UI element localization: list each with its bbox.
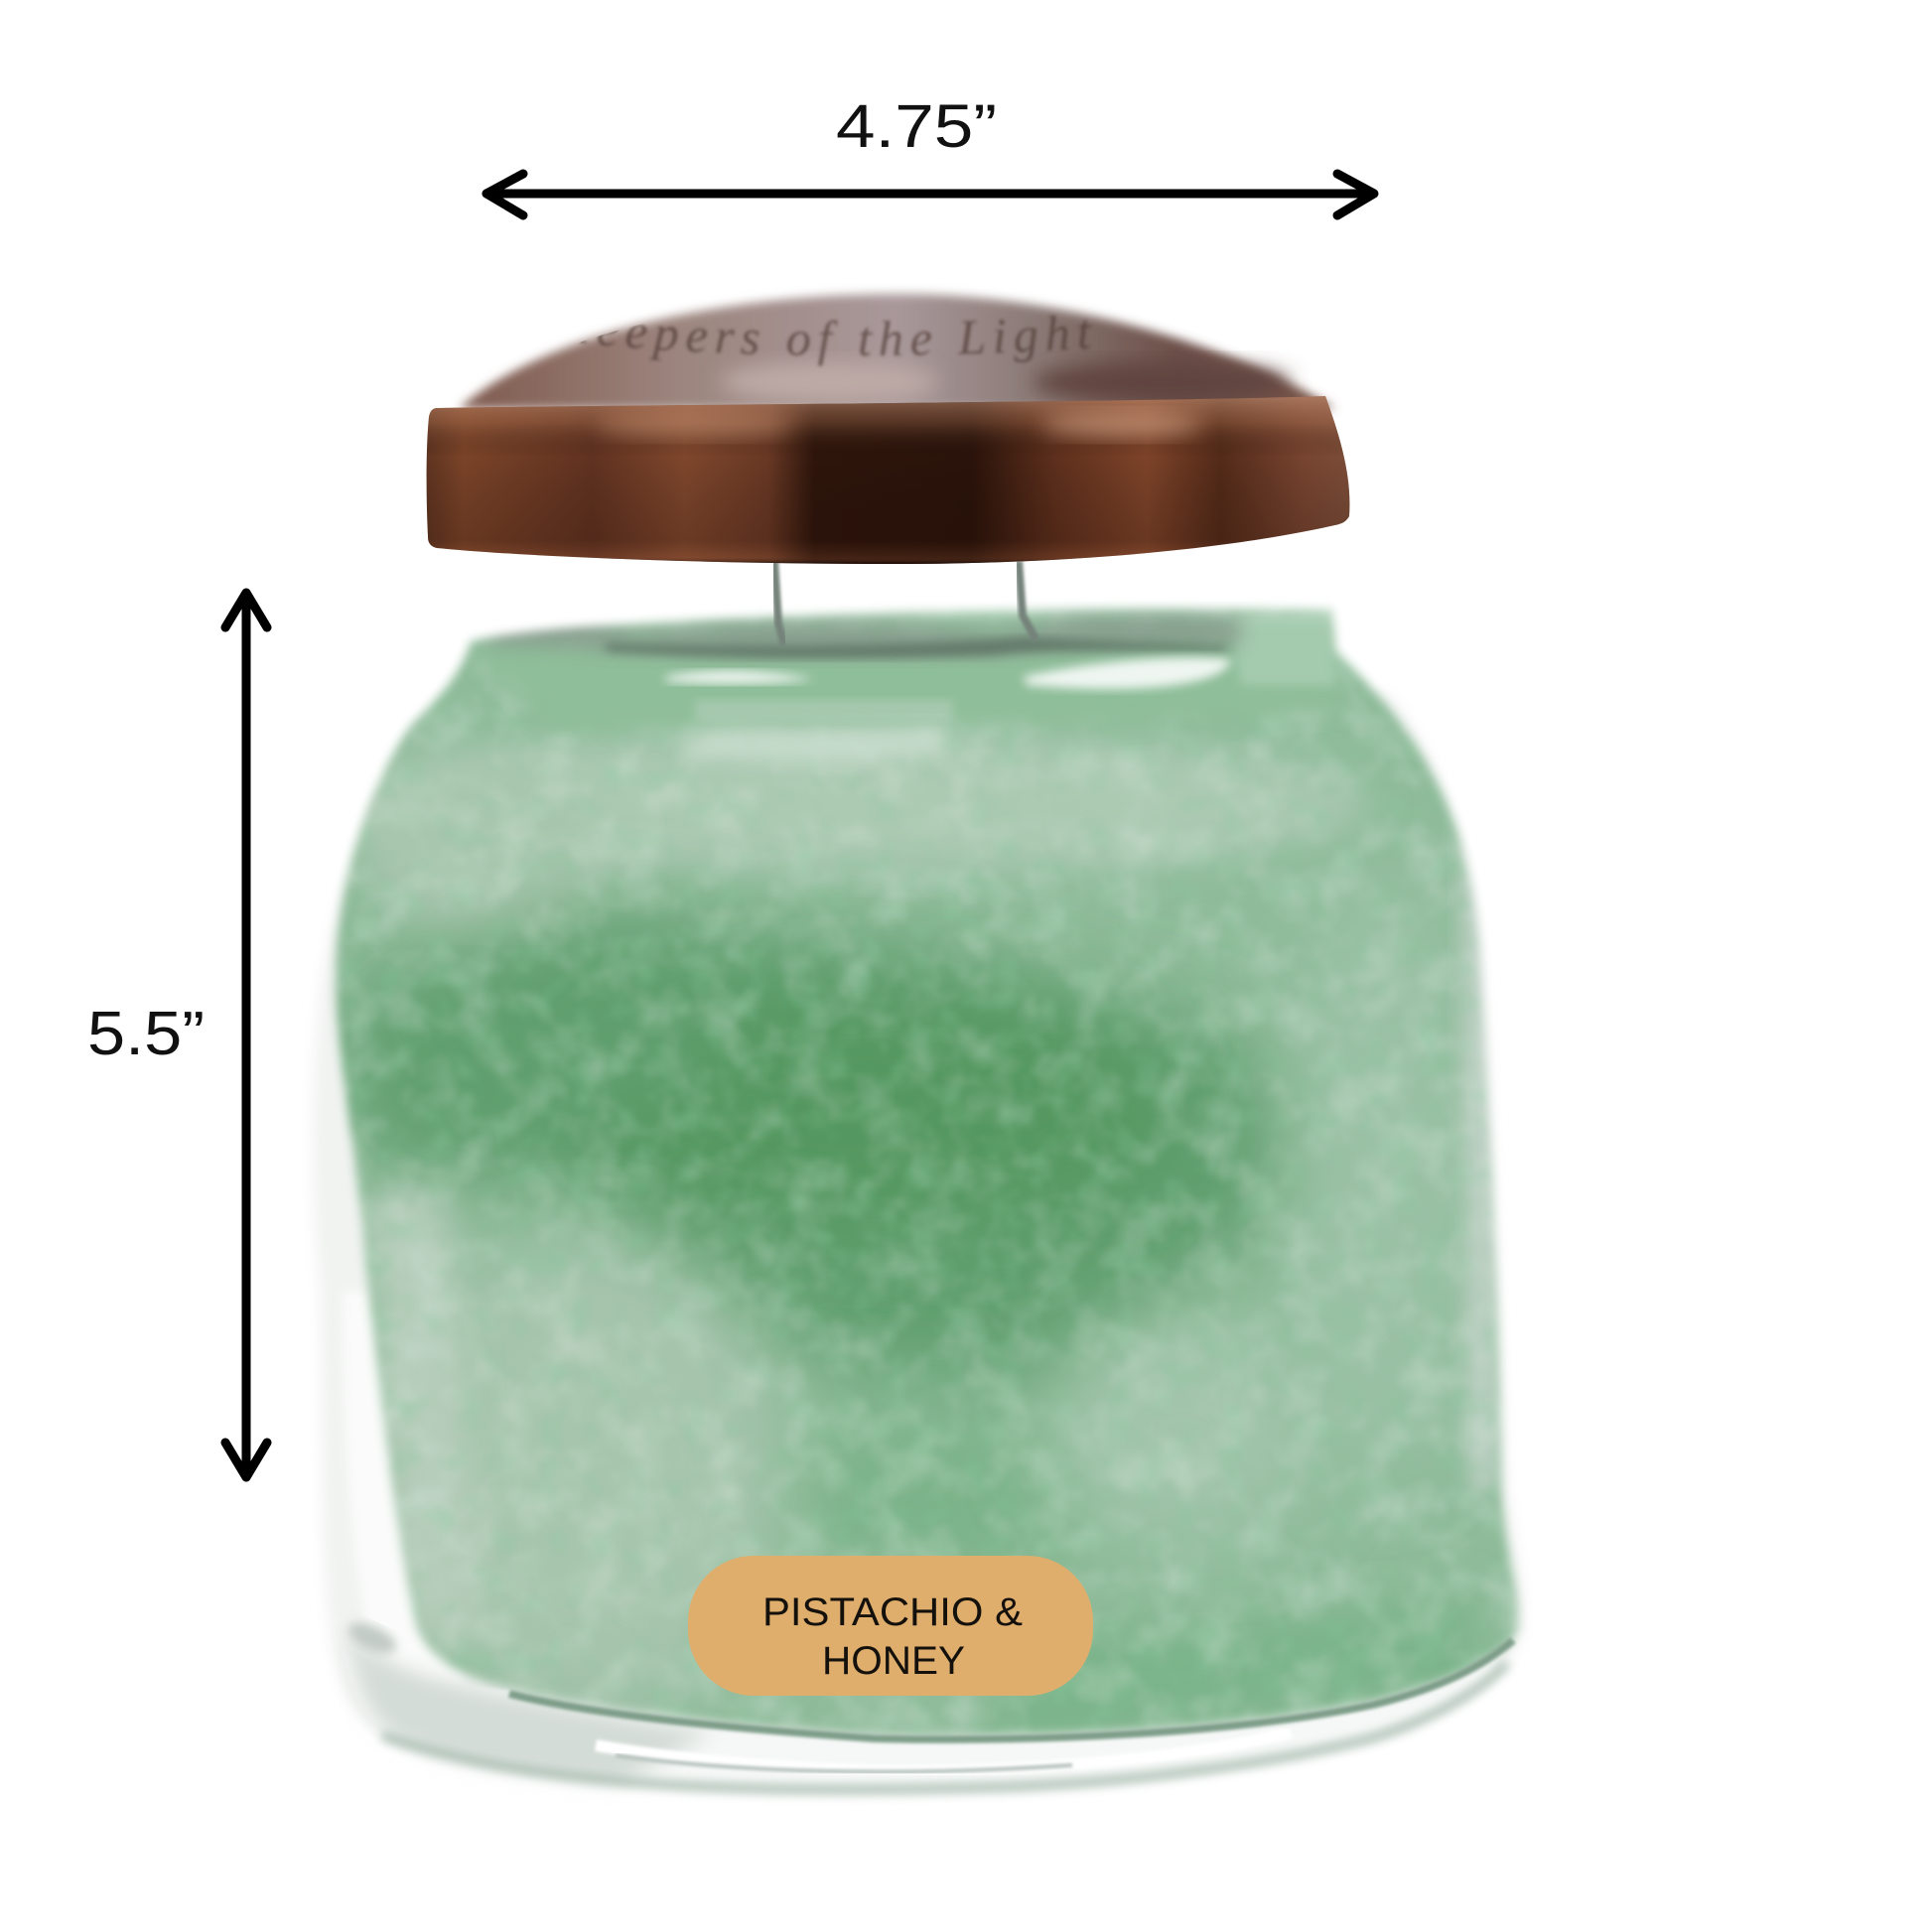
- neck wax and rim reflections: [475, 600, 1333, 769]
- outer bottom edge: [382, 1663, 1507, 1789]
- label text: HONEY: [822, 1639, 965, 1683]
- infographic: candle jar with dimensions: [89, 105, 1526, 1801]
- glass jar body: [312, 695, 1524, 1793]
- label text: [762, 1590, 1023, 1683]
- wicks: [774, 561, 1036, 645]
- wax fill with mottled green: [329, 602, 1524, 1735]
- width label: 4.75”: [836, 92, 997, 160]
- base glass fill: [343, 1638, 1514, 1793]
- wax bottom line: [509, 1640, 1513, 1739]
- streaks: [596, 1732, 1291, 1771]
- candle jar: [258, 287, 1526, 1801]
- width dimension arrow: [486, 174, 1374, 215]
- copper lid: [427, 287, 1350, 564]
- wax mottling: [337, 618, 1519, 1733]
- pale upper wax: [298, 735, 1370, 874]
- lid dome: [456, 287, 1337, 415]
- lower wax tones: [792, 1426, 1070, 1560]
- height label: 5.5”: [87, 1000, 205, 1068]
- scent label: [688, 1556, 1093, 1696]
- embossed lid text: Keepers of the Light: [578, 314, 1091, 367]
- lid band: [427, 396, 1349, 564]
- dark heart-shaped swirl: [338, 908, 1320, 1390]
- glass base with reflections: [343, 1616, 1514, 1793]
- height dimension arrow: [225, 593, 267, 1477]
- left corner shadow: [344, 1616, 401, 1660]
- band highlights: [596, 413, 794, 437]
- left corner haze: [347, 1628, 715, 1782]
- label text: PISTACHIO &: [762, 1590, 1023, 1634]
